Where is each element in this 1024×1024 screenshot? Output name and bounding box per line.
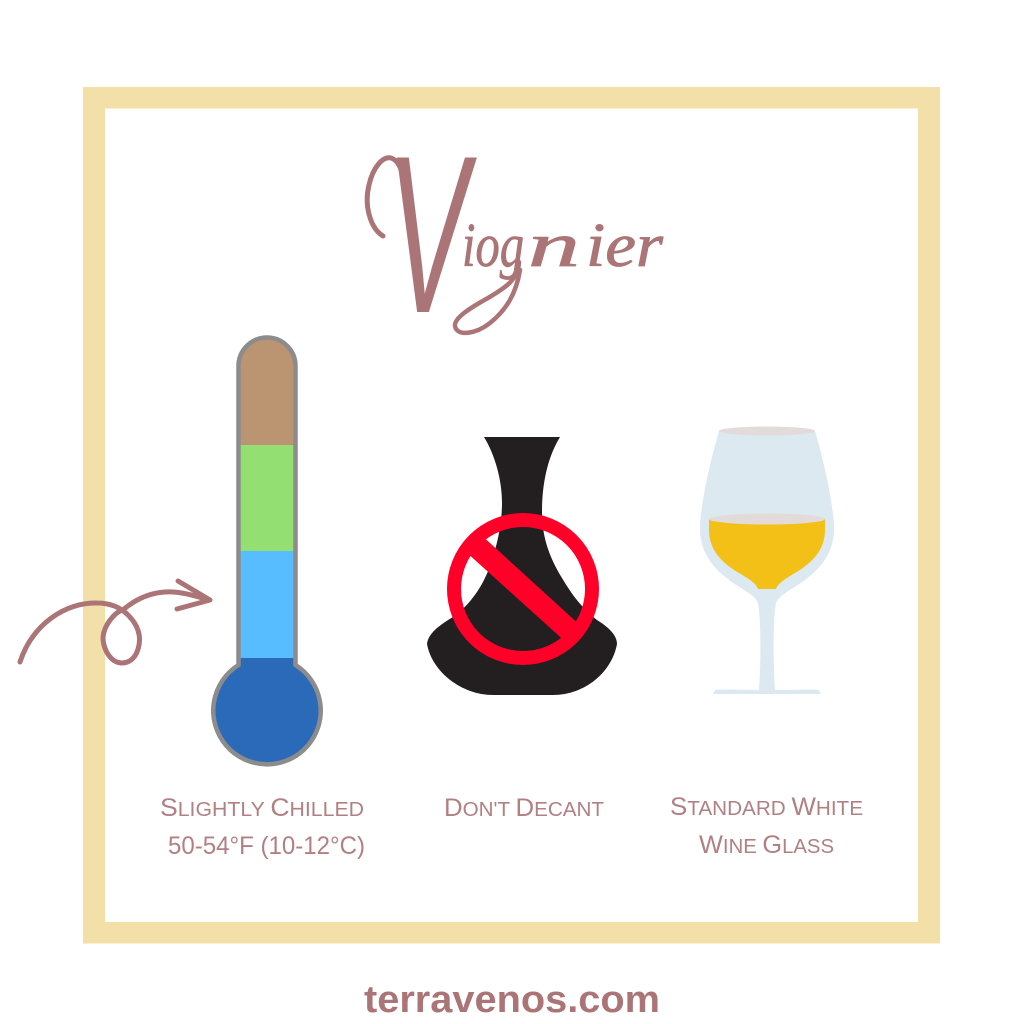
- band: light blue: [240, 551, 294, 658]
- label: decanting: DON'T DECANT: [444, 794, 604, 822]
- arrow: curly arrow pointing at thermometer: [20, 581, 210, 663]
- label: serving temperature: SLIGHTLY CHILLED: [160, 794, 364, 822]
- band: dark blue bulb: [216, 658, 318, 762]
- title: Viognier: [367, 110, 664, 360]
- label: glass type: WINE GLASS: [699, 831, 834, 859]
- frame: cream border: [83, 87, 940, 944]
- title: Viognier: ier: [586, 212, 664, 280]
- icon: white wine glass: [700, 426, 834, 694]
- wine: [709, 519, 825, 589]
- icon: decanter with prohibition sign: [427, 437, 617, 695]
- decanter: [427, 437, 617, 695]
- glass rim: [719, 426, 815, 436]
- band: brown top: [240, 340, 294, 445]
- label: glass type: [670, 793, 863, 859]
- label: serving temperature: 50-54°F (10-12°C): [168, 832, 365, 860]
- wine surface: [709, 514, 825, 524]
- title: Viognier: n: [528, 212, 580, 280]
- no sign: [454, 520, 592, 658]
- thermometer: [211, 335, 323, 767]
- label: glass type: STANDARD WHITE: [670, 793, 863, 821]
- glass body: [700, 431, 834, 694]
- website footer: terravenos.com: [364, 979, 660, 1021]
- label: serving temperature: [160, 794, 365, 860]
- band: green: [240, 445, 294, 551]
- title: Viognier: iog: [462, 212, 524, 280]
- title: Viognier: V: [378, 110, 482, 360]
